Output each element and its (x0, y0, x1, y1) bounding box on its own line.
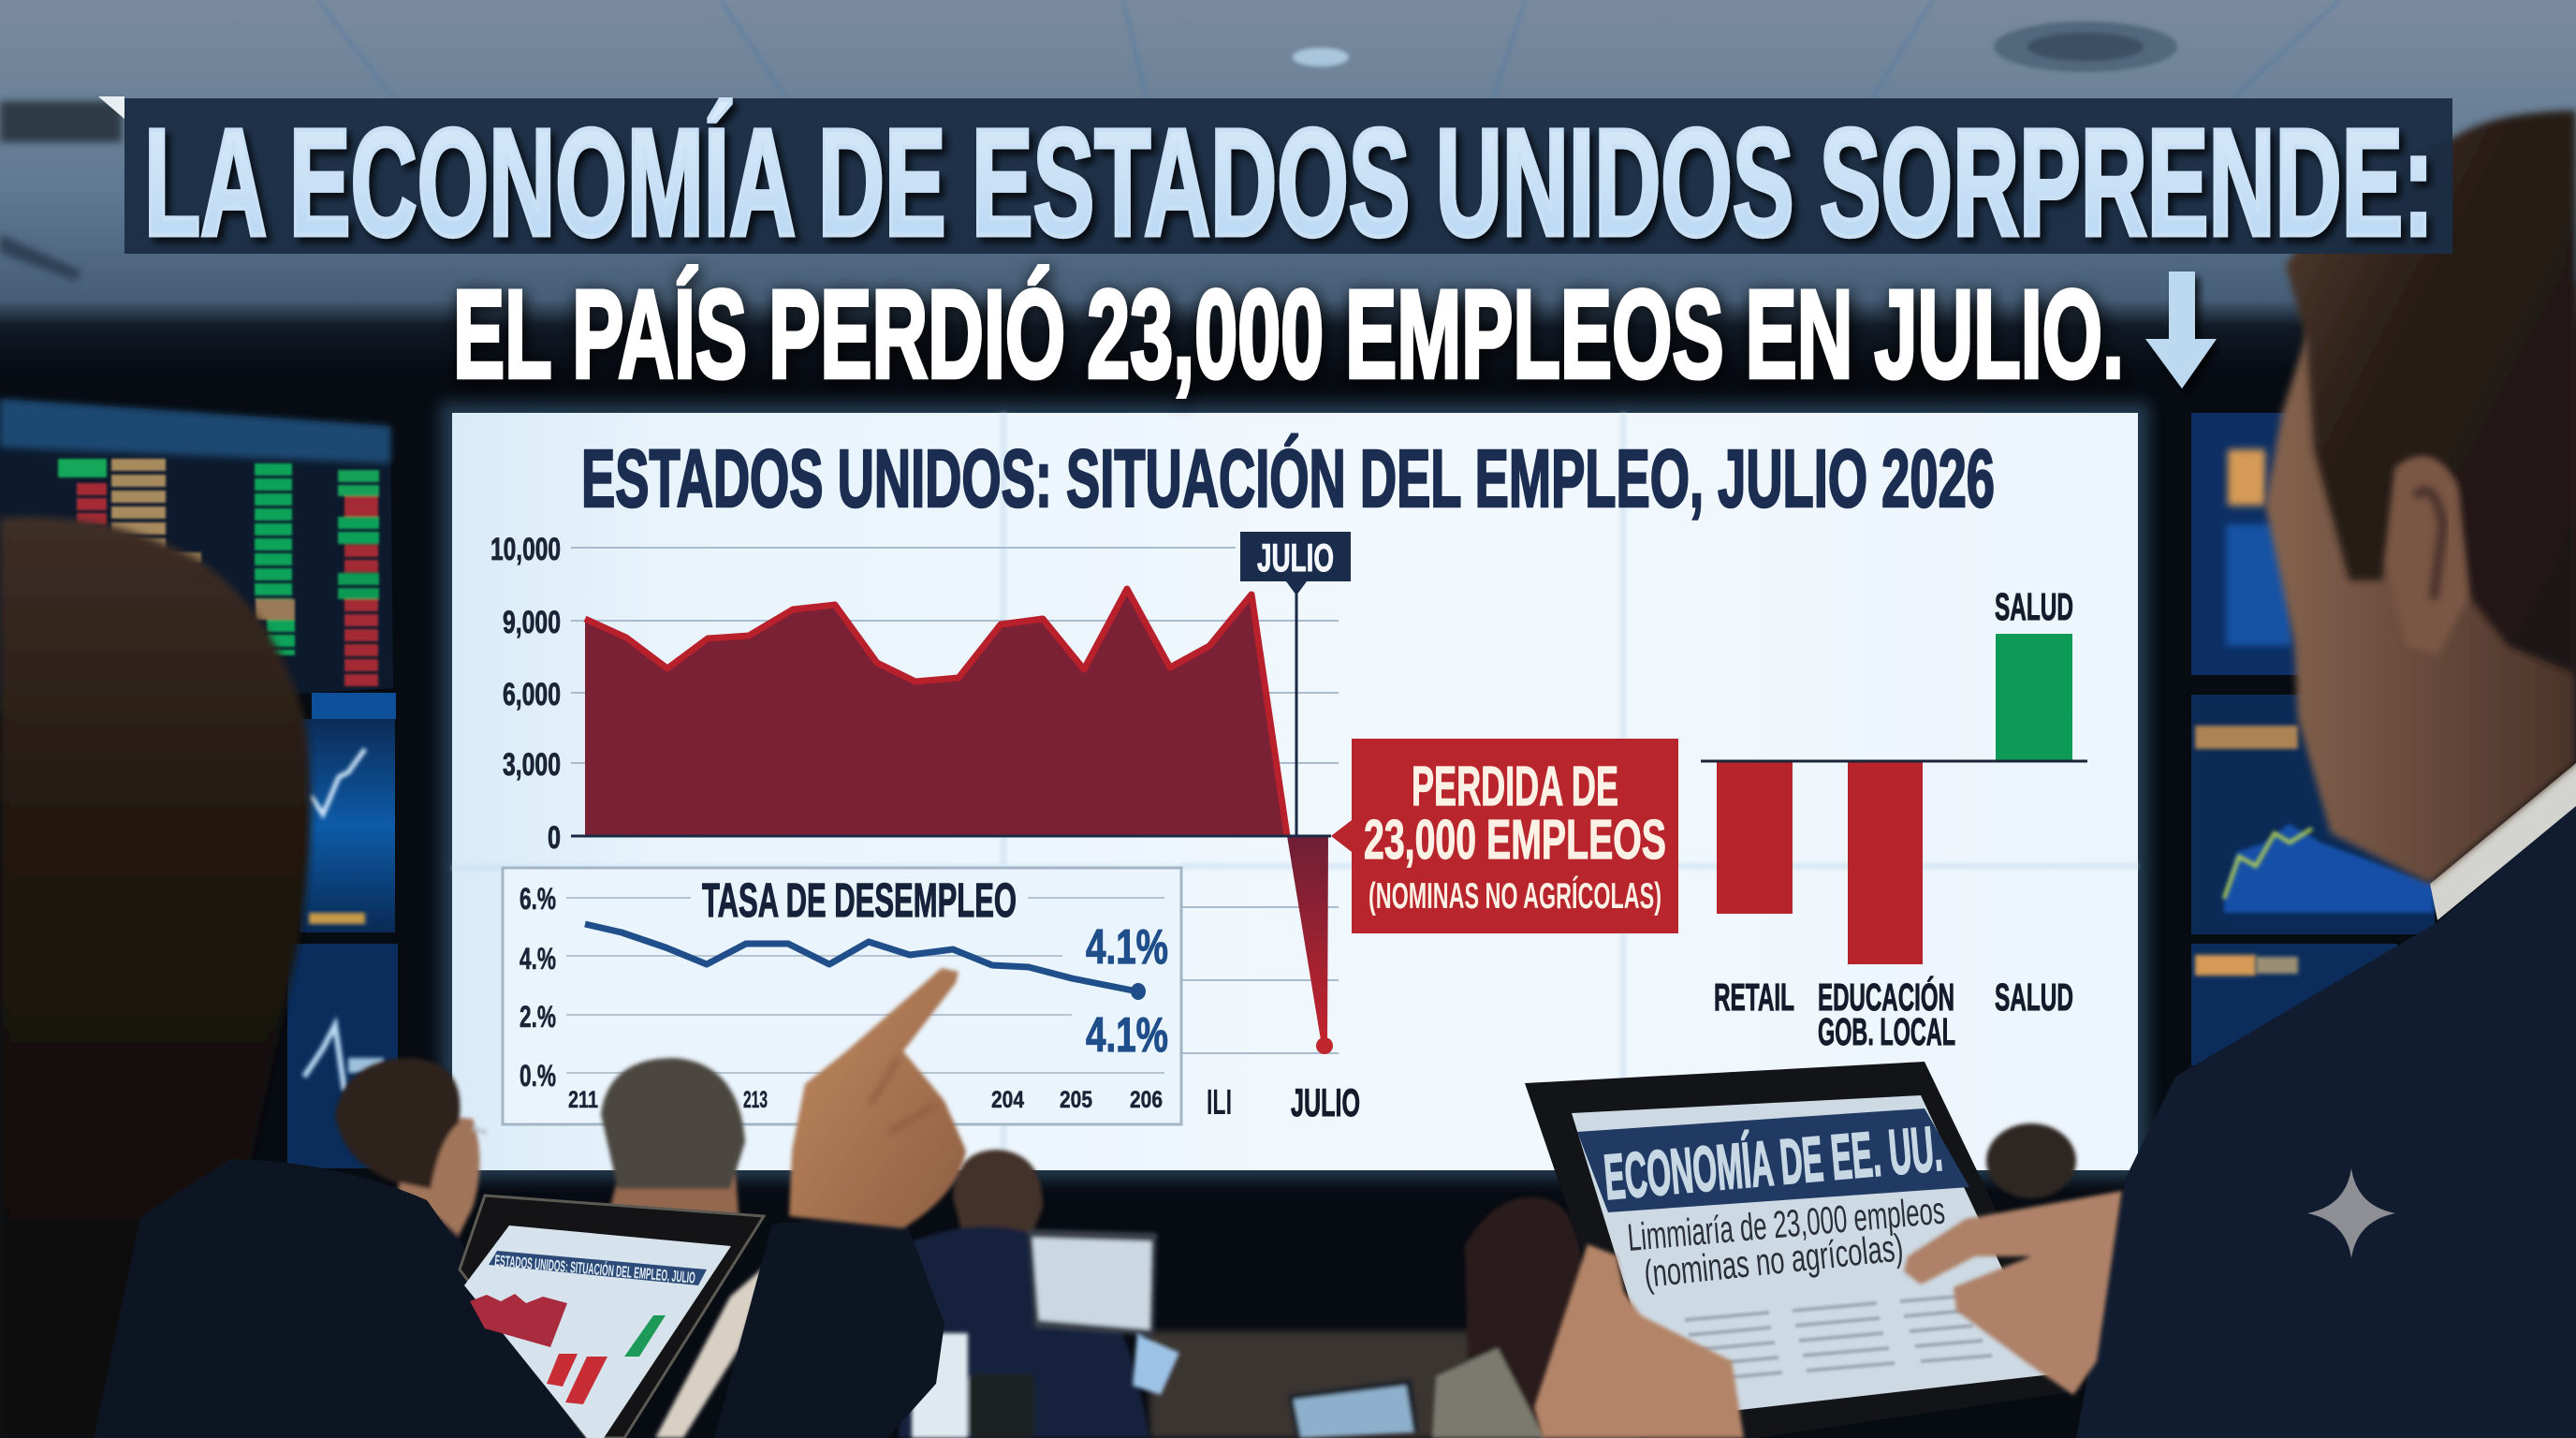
bar chart: sectors (1701, 585, 2087, 1053)
inset chart: unemployment rate: 4.% (520, 942, 556, 976)
inset chart: unemployment rate: TASA DE DESEMPLEO (702, 873, 1017, 927)
area chart: nonfarm payrolls (490, 532, 1360, 1124)
laptop (912, 1229, 1179, 1438)
inset chart: unemployment rate: 204 (991, 1087, 1024, 1113)
bar chart: sectors: RETAIL (1714, 976, 1794, 1019)
man in foreground (2076, 110, 2576, 1438)
woman in foreground (0, 517, 587, 1438)
woman behind tablet (1288, 1123, 2076, 1438)
inset chart: unemployment rate (503, 868, 1181, 1124)
y axis labels: 3,000 (503, 747, 561, 783)
inset chart: unemployment rate: 213 (743, 1087, 768, 1113)
hands on tablet (1534, 1191, 2122, 1438)
main wall screen (440, 403, 2149, 1180)
left tablet with mini chart (460, 1196, 764, 1438)
icon: down arrow (2145, 271, 2217, 389)
left blue chart monitors (287, 719, 398, 1168)
right tablet with news story: ECONOMÍA DE EE. UU. (1602, 1113, 1945, 1213)
callout: job loss: PERDIDA DE (1412, 756, 1618, 817)
inset chart: unemployment rate: 206 (1130, 1087, 1163, 1113)
audience: seated people (328, 1058, 2076, 1438)
right tablet with news story (1525, 1062, 2083, 1438)
inset chart: unemployment rate: 0.% (520, 1059, 556, 1093)
inset chart: unemployment rate: 2.% (520, 1000, 556, 1034)
man from behind (899, 1150, 1149, 1438)
bar chart: sectors: GOB. LOCAL (1818, 1010, 1955, 1053)
y axis labels: 6,000 (503, 677, 561, 712)
icon: sparkle watermark (2307, 1168, 2395, 1258)
left ticker monitor (0, 399, 396, 719)
callout: job loss: 23,000 EMPLEOS (1364, 809, 1666, 871)
y axis labels: 0 (548, 820, 561, 856)
man with grey hair (601, 1058, 768, 1438)
y axis labels: 10,000 (490, 532, 561, 567)
bar chart: sectors: SALUD (1995, 976, 2073, 1019)
pointing hand and sleeve (714, 968, 966, 1438)
left tablet with mini chart: ESTADOS UNIDOS: SITUACIÓN DEL EMPLEO, JULIO (494, 1252, 695, 1287)
julio tag: JULIO (1257, 536, 1334, 580)
right monitors (2191, 413, 2435, 1065)
bottom x label: JULIO (1291, 1080, 1360, 1124)
area chart: nonfarm payrolls: ILI (1207, 1083, 1232, 1123)
inset chart: unemployment rate: 6.% (520, 882, 556, 916)
y axis labels (490, 532, 561, 856)
julio tag (1240, 532, 1351, 595)
right tablet with news story: (nominas no agrícolas) (1642, 1225, 1905, 1296)
y axis labels: 9,000 (503, 605, 561, 640)
inset chart: unemployment rate: 205 (1060, 1087, 1092, 1113)
callout: job loss (1331, 739, 1678, 933)
inset chart: unemployment rate: 4.1% (1086, 1008, 1168, 1063)
callout: job loss: (NOMINAS NO AGRÍCOLAS) (1368, 875, 1661, 917)
inset chart: unemployment rate: 4.1% (1086, 920, 1168, 975)
right tablet with news story: Limmiaría de 23,000 empleos (1626, 1189, 1946, 1259)
bar chart: sectors: SALUD (1995, 585, 2073, 628)
bar chart: sectors: EDUCACIÓN (1818, 976, 1954, 1019)
inset chart: unemployment rate: 211 (568, 1087, 598, 1113)
man with glasses (328, 1058, 487, 1311)
